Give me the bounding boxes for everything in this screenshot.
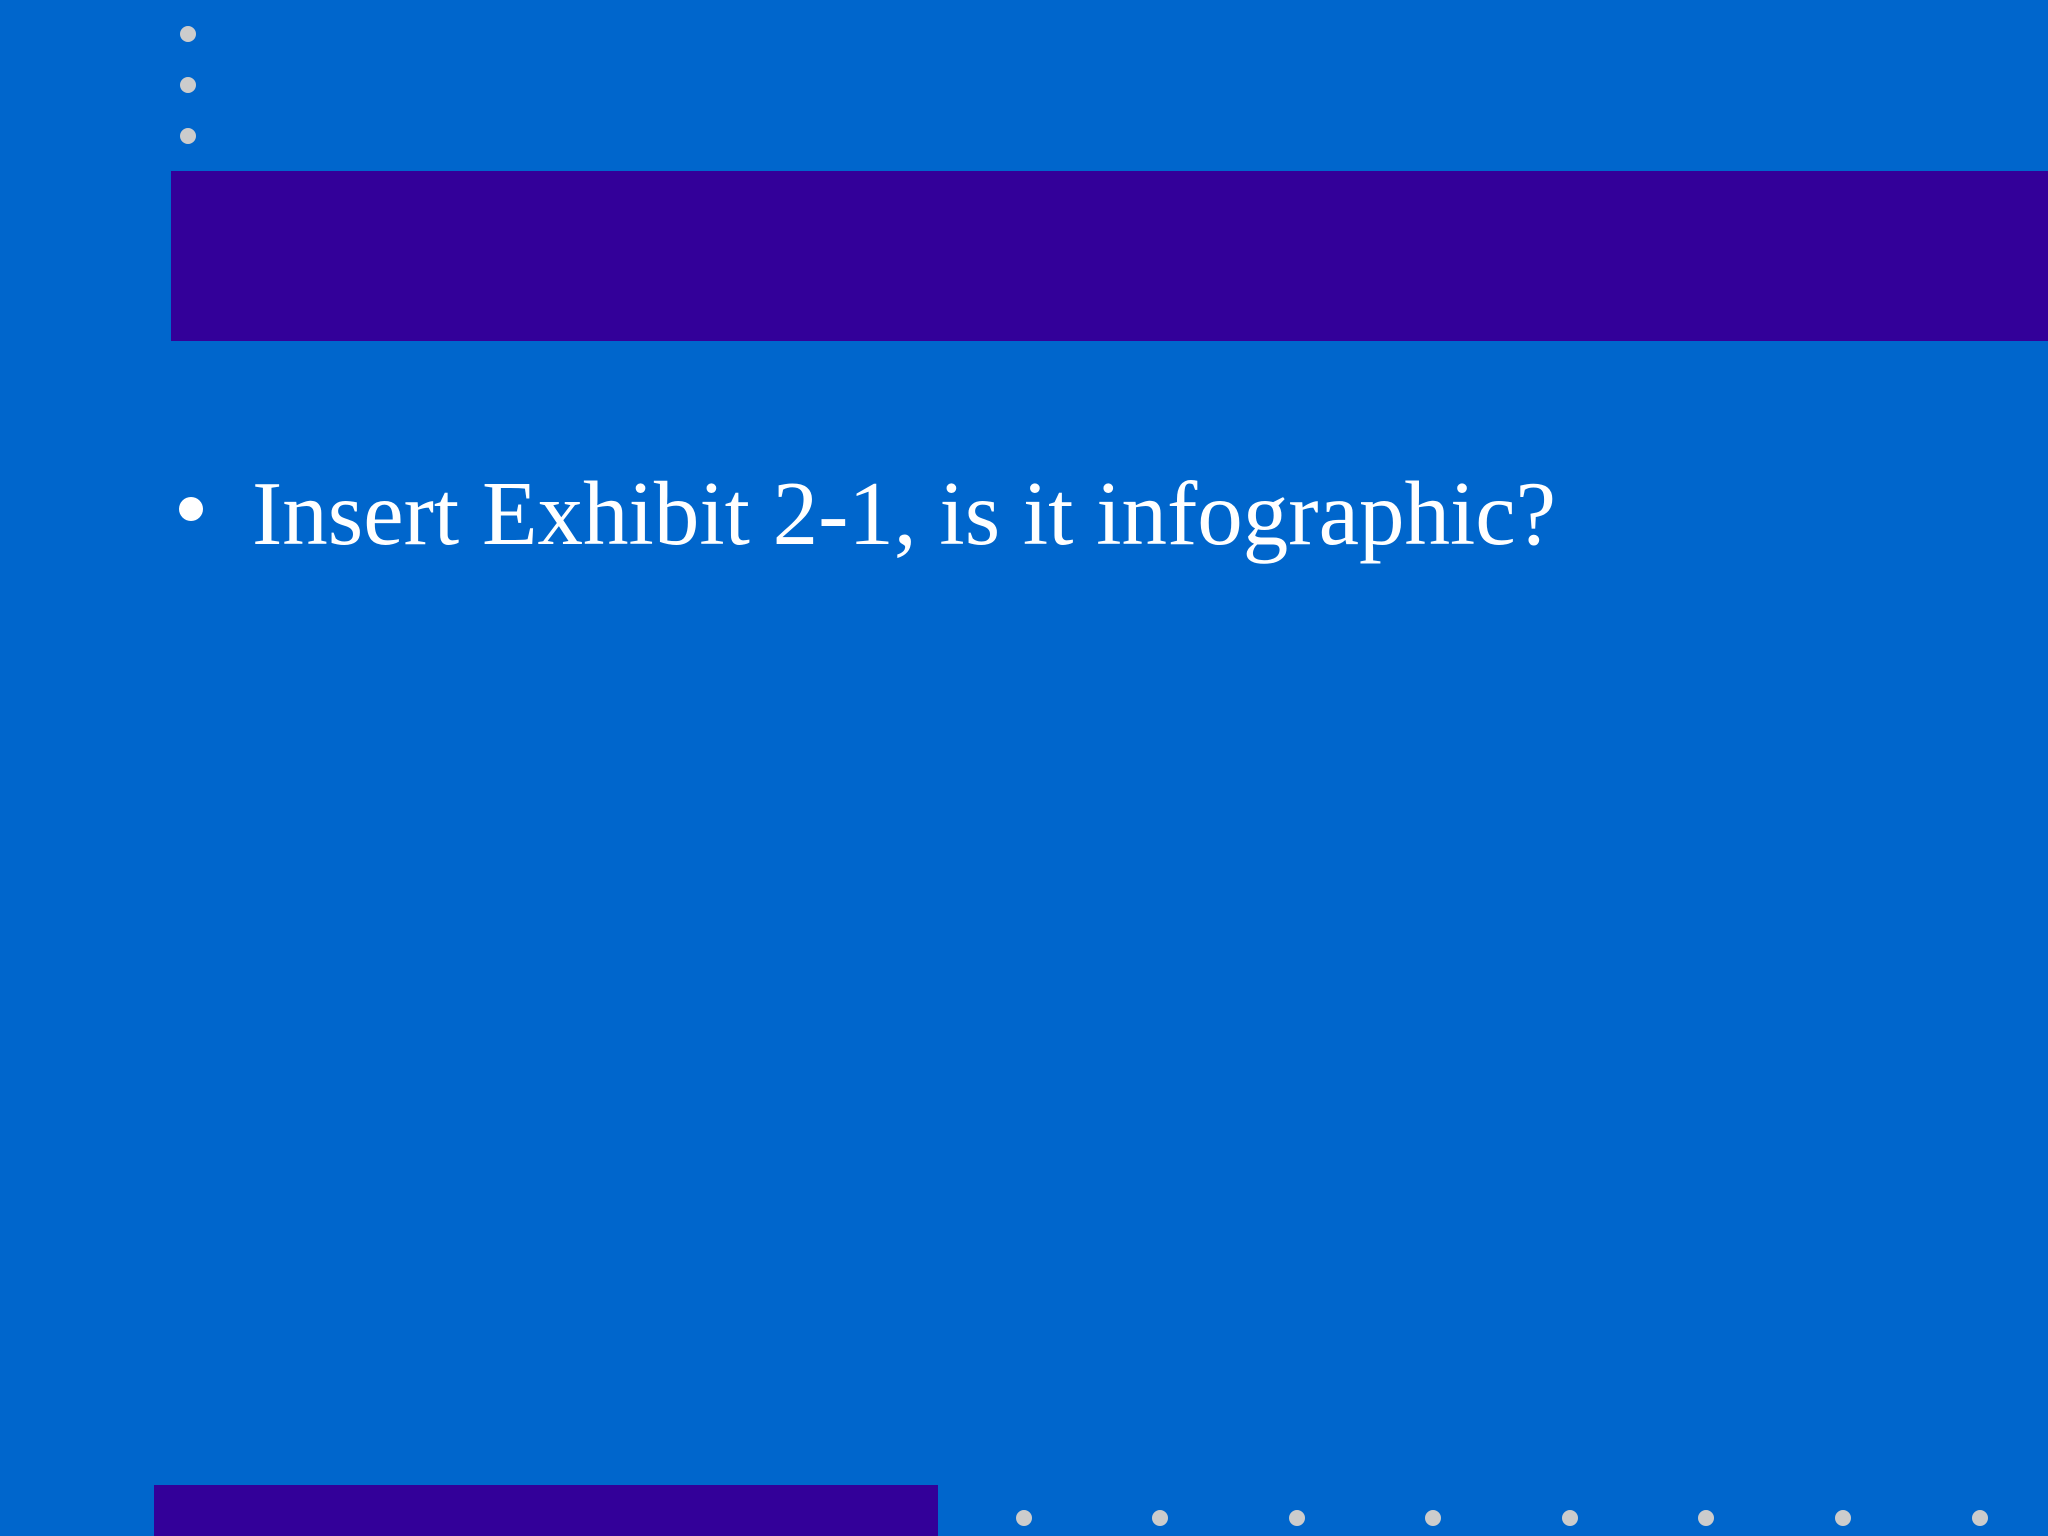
bullet text block xyxy=(179,463,1556,564)
bottom band xyxy=(154,1485,938,1536)
decorative dots: bottom row xyxy=(1016,1510,1988,1526)
title band xyxy=(171,171,2048,341)
body text: Insert Exhibit 2-1, is it infographic? xyxy=(252,463,1556,564)
decorative dots: top-left column xyxy=(180,26,196,144)
bullet xyxy=(179,497,203,521)
